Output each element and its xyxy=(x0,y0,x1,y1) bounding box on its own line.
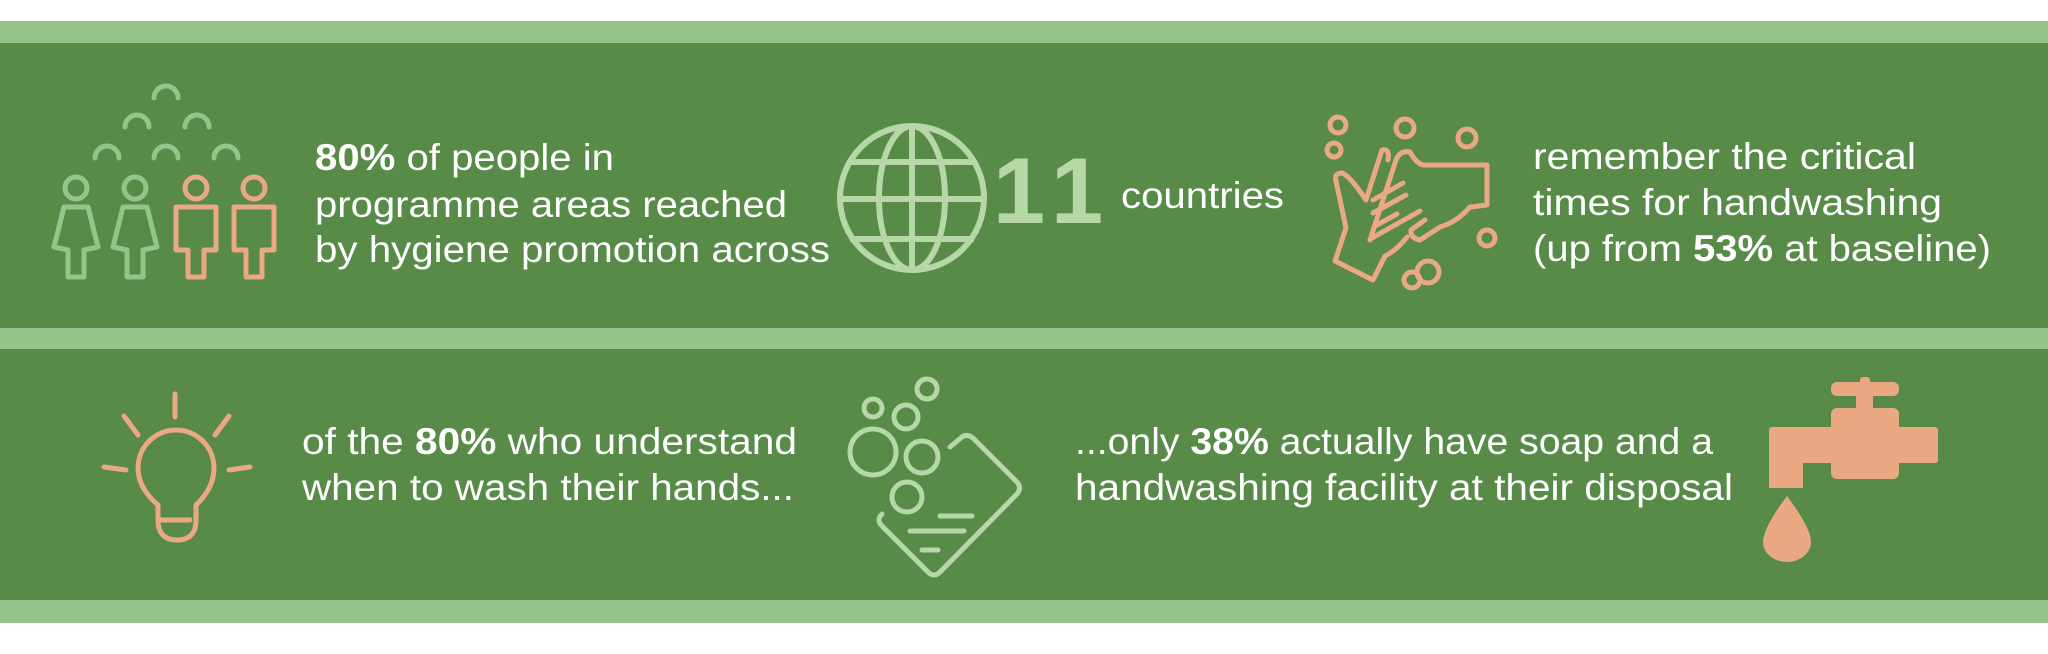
icon: tap with drop xyxy=(1763,377,1938,562)
text: only 38% have soap: handwashing facility at their disposal xyxy=(1075,467,1733,508)
text: 80% of people xyxy=(315,137,830,270)
number: 11: 1 xyxy=(1051,138,1103,243)
number: 11: 1 xyxy=(993,138,1045,243)
text: of the 80% who understand: when to wash their hands... xyxy=(301,467,794,508)
number: 11 xyxy=(993,138,1103,243)
text: 80% of people: programme areas reached xyxy=(315,184,787,225)
text: 80% of people: 80% of people in xyxy=(315,137,614,178)
text: only 38% have soap: ...only 38% actually have soap and a xyxy=(1075,421,1713,462)
text: of the 80% who understand xyxy=(301,421,797,508)
text: remember critical times: (up from 53% at baseline) xyxy=(1533,228,1991,269)
text: only 38% have soap xyxy=(1075,421,1733,508)
text: remember critical times xyxy=(1533,136,1991,269)
text: 80% of people: by hygiene promotion across xyxy=(315,229,830,270)
icon: washing hands xyxy=(1327,117,1495,288)
icon: people group xyxy=(54,86,274,277)
icon: light bulb xyxy=(104,394,250,540)
text: remember critical times: times for handwashing xyxy=(1533,182,1942,223)
text: remember critical times: remember the critical xyxy=(1533,136,1916,177)
icon: soap with bubbles xyxy=(850,379,1020,575)
text: of the 80% who understand: of the 80% who understand xyxy=(302,421,797,462)
icon: globe xyxy=(840,126,984,270)
text: countries: countries xyxy=(1121,175,1284,216)
